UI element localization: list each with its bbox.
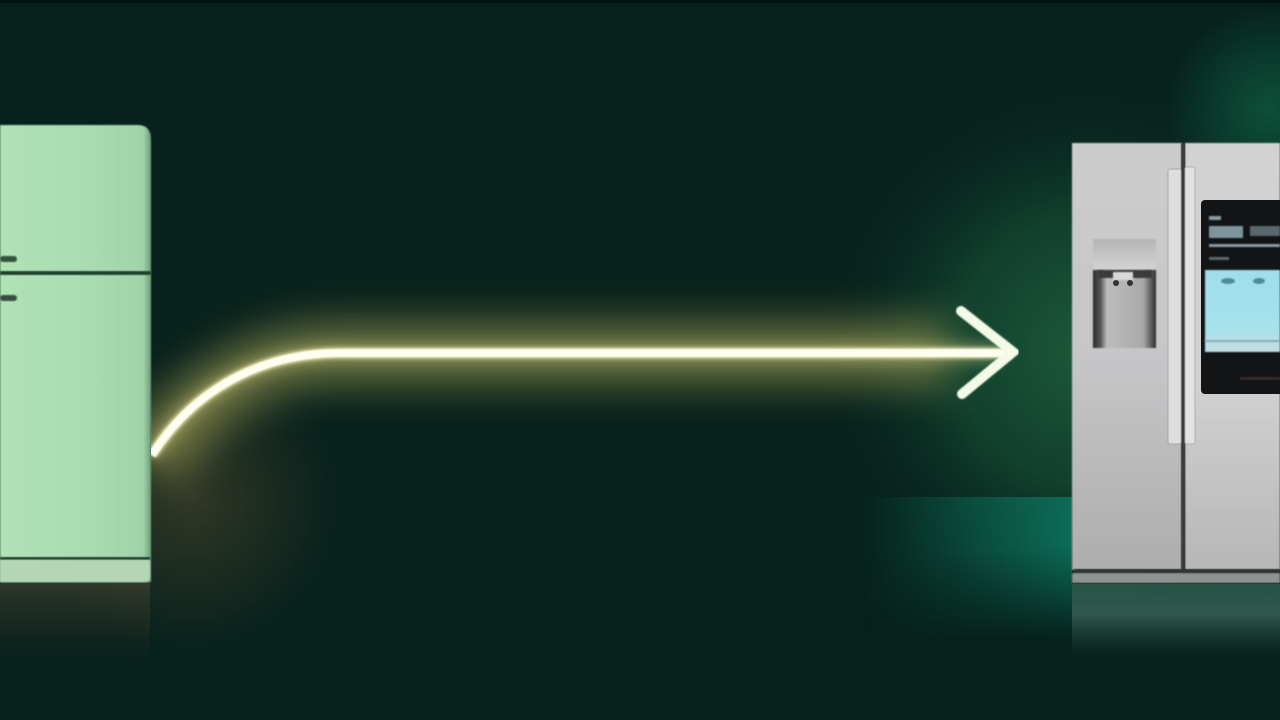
arrow halo bbox=[152, 353, 1000, 455]
smart screen bbox=[1201, 200, 1280, 394]
fridge reflection bbox=[0, 582, 150, 667]
plinth bbox=[1072, 573, 1280, 583]
fridge plinth bbox=[0, 560, 150, 582]
arrow inner bloom bbox=[152, 353, 1010, 455]
smart steel fridge bbox=[1072, 143, 1280, 660]
teal floor glow bbox=[884, 497, 1072, 630]
right handle bbox=[1185, 167, 1195, 444]
left handle bbox=[1168, 169, 1181, 444]
fridge body bbox=[0, 125, 151, 582]
fridge reflection bbox=[1072, 584, 1280, 660]
arrow amber glow bbox=[152, 353, 950, 465]
neon arrow bbox=[152, 311, 1013, 465]
lower door handle bbox=[0, 295, 17, 301]
retro green fridge bbox=[0, 125, 151, 667]
arrow head bbox=[961, 311, 1013, 394]
screen status readouts bbox=[1209, 216, 1280, 260]
right door bbox=[1185, 143, 1280, 570]
arrow shaft bbox=[152, 353, 1010, 455]
screen weather marks bbox=[1221, 278, 1265, 284]
base seam bbox=[1074, 569, 1280, 573]
screen blue weather panel bbox=[1205, 270, 1280, 352]
door gap bbox=[1181, 143, 1185, 571]
ice dispenser panel bbox=[1093, 239, 1156, 269]
base seam bbox=[0, 557, 150, 560]
left door bbox=[1072, 143, 1182, 570]
screen lower strip bbox=[1205, 340, 1280, 342]
water dispenser bay bbox=[1093, 270, 1156, 348]
upper door handle bbox=[0, 256, 17, 262]
freezer door seam bbox=[0, 271, 151, 275]
